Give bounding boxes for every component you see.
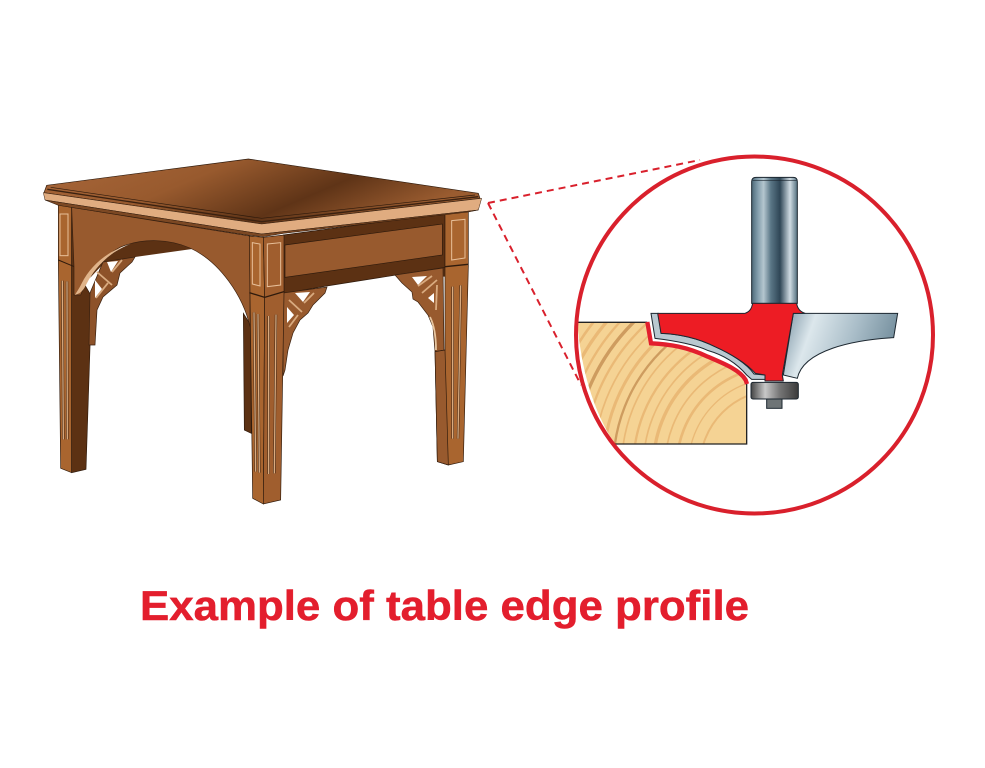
front right bracket — [283, 287, 327, 376]
caption: Example of table edge profile — [140, 582, 749, 629]
silver cutter right — [783, 313, 898, 378]
wood workpiece — [578, 322, 748, 445]
carbide left — [651, 313, 765, 379]
dashed callout lines — [488, 160, 700, 385]
right apron panel — [283, 213, 445, 293]
red bit body — [658, 303, 805, 381]
left leg — [58, 205, 92, 473]
left arch underside and bracket — [89, 239, 192, 345]
far right bracket — [395, 268, 444, 352]
inset: router bit cutting edge profile — [578, 176, 898, 445]
left arch edge — [75, 247, 123, 295]
front corner leg — [249, 235, 284, 504]
red cut line — [647, 322, 747, 384]
bit shank — [752, 177, 797, 303]
back legs and underside — [243, 263, 447, 433]
bearing and nut — [751, 382, 798, 408]
inset circle — [576, 156, 933, 514]
illustration: wooden table — [43, 159, 482, 504]
table top — [43, 159, 482, 237]
right leg — [435, 211, 468, 465]
left apron with arch — [72, 207, 250, 327]
